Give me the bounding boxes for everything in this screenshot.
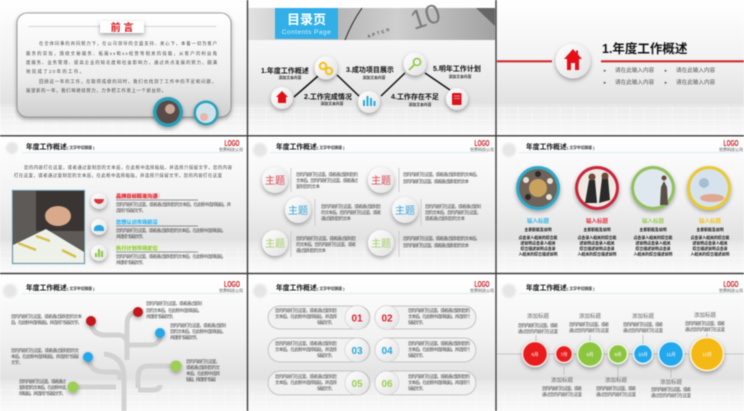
tree branches xyxy=(73,312,176,411)
caption blue: 主要职能及说明 xyxy=(524,227,552,232)
theme 4: 您的文本后。您的内容打在这里， xyxy=(425,209,481,216)
pill 01: 文本后。在此框中选择粘贴，并选择 xyxy=(275,313,338,320)
month 10 xyxy=(634,344,652,364)
caption blue xyxy=(519,217,558,256)
node green 2 xyxy=(68,382,78,392)
theme 2: 您的内容打在这里，或者通过复制您的文本后。 xyxy=(403,171,480,178)
label 3: 3.成功项目展示 xyxy=(346,65,394,74)
theme 3: 主题 xyxy=(288,205,308,217)
bullets: ➤ xyxy=(603,68,607,73)
label bottom 2: 通过您的内容打在这里 xyxy=(596,391,637,398)
month 12: 12月 xyxy=(702,352,712,358)
caption red: 入相关的综合描述说明 xyxy=(578,252,617,256)
text block 3: 并选择只保留文字。 xyxy=(170,334,200,341)
label 3: 添加文本内容 xyxy=(363,75,386,80)
caption green: 述说明点击录入相关 xyxy=(635,240,671,246)
label top 4: 添加标题 xyxy=(694,311,716,319)
intro text xyxy=(14,164,233,179)
text block 2: 您的内容打在这里，或者通过复制 xyxy=(146,300,203,307)
item 2: 您想认识市场前沿 xyxy=(116,218,158,226)
text block 5: 或者通过复制您的文 xyxy=(186,364,221,371)
item 2: 您的内容打在这里，或者通过复制您的文本后，在此框中选择粘贴， xyxy=(116,227,226,234)
label 4: 4.工作存在不足 xyxy=(391,92,439,101)
slide header xyxy=(502,280,743,298)
node: home xyxy=(271,87,293,109)
bullets: ➤ xyxy=(603,80,607,85)
node blue 2 xyxy=(83,352,93,362)
label top 2: 通过您的内容打在这里 xyxy=(569,327,610,334)
slide header: LOGO xyxy=(224,280,240,289)
label 5: 添加文本内容 xyxy=(449,74,472,79)
text block 4: 本后。在此框中选择粘贴，并选择只保留 xyxy=(11,353,80,360)
caption green xyxy=(634,217,673,256)
node green 1 xyxy=(170,360,182,372)
caption red: 输入标题 xyxy=(586,217,608,225)
theme 6: 您的内容打在这里，或者通过复制您的文本 xyxy=(403,242,470,249)
text block 5: 您的内容打在这里， xyxy=(186,358,220,365)
pill 01 xyxy=(268,306,370,330)
preface text: 地完成了20年的工作。 xyxy=(26,68,84,75)
theme 4: 主题 xyxy=(395,205,415,217)
node: gears xyxy=(314,56,338,80)
label bottom 3: 添加标题 xyxy=(660,378,682,386)
caption yellow xyxy=(691,217,730,256)
label bottom 3: 您的内容打在这里，或者 xyxy=(651,386,692,393)
slide header: 世界科技公司 xyxy=(719,146,743,152)
slide header: 年度工作概述 xyxy=(276,283,317,292)
photo circle blue xyxy=(516,166,560,210)
pill 04: 您的内容打在这里，或者通过复制您的 xyxy=(408,340,471,347)
pill 05: 文本后。在此框中选择粘贴，并选择 xyxy=(275,379,338,386)
slide header: 年度工作概述 xyxy=(26,142,67,151)
label top 3: 您的内容打在这里，或者 xyxy=(623,321,664,328)
caption blue: 点击录入相关的综合能 xyxy=(519,235,558,240)
caption red: 述说明点击录入相关 xyxy=(579,240,615,246)
label bottom 1: 通过您的内容打在这里 xyxy=(542,391,583,398)
label bottom 1: 您的内容打在这里，或者 xyxy=(542,385,583,392)
caption green: 点击录入相关的综合能 xyxy=(634,235,673,240)
label top 4 xyxy=(685,311,726,333)
month 9: 9月 xyxy=(614,352,622,358)
slide: numbered pills xyxy=(248,276,495,411)
label top 3: 添加标题 xyxy=(632,312,654,320)
label top 4: 通过您的内容打在这里 xyxy=(685,326,726,333)
slide header: LOGO xyxy=(224,139,240,148)
label bottom 3: 通过您的内容打在这里 xyxy=(651,392,692,399)
pill 04: 文本后。在此框中选择粘贴，并选择只 xyxy=(408,346,471,353)
title box: Contents Page xyxy=(282,29,331,36)
month 9 xyxy=(608,344,628,364)
theme 1: 主题 xyxy=(265,175,285,187)
slide header: 年度工作概述 xyxy=(276,142,317,151)
label 2: 添加文本内容 xyxy=(321,101,344,106)
caption red xyxy=(578,217,617,256)
slide header: 世界科技公司 xyxy=(219,287,243,293)
pill 05: 保留文字。 xyxy=(317,385,335,392)
label bottom 1 xyxy=(542,376,583,398)
text block 5: 本后。在此框中选择 xyxy=(186,370,221,377)
theme 3: 通过复制您的文本 xyxy=(321,215,352,222)
slide header xyxy=(253,280,494,298)
slide header: ( 文字中切换版 ) xyxy=(317,286,345,291)
text block 6: 复制您的文本后。在此框中选 xyxy=(19,384,67,391)
slide: contents xyxy=(248,0,495,135)
pill 06: 文本后。在此框中选择粘贴，并选择只 xyxy=(408,379,471,386)
theme 6 xyxy=(368,230,480,257)
caption yellow: 输入标题 xyxy=(699,217,721,225)
pill 06 xyxy=(375,371,476,395)
text block 5 xyxy=(186,358,221,383)
title box: 目录页 xyxy=(287,12,326,27)
text block 3: 您的文本后。在此框中选择粘贴， xyxy=(170,328,226,335)
text block 2: 并选择只保留文字。 xyxy=(146,313,176,320)
slide header: 年度工作概述 xyxy=(526,142,567,151)
preface text: 度服务、业务管理、提高企业的知名度和社会影响力，通过共点发展的努力，圆满 xyxy=(26,59,218,66)
caption green: 主要职能及说明 xyxy=(639,227,667,232)
label bottom 1: 添加标题 xyxy=(551,376,573,384)
label top 4: 您的内容打在这里，或者 xyxy=(685,320,726,327)
slide header: ( 文字中切换版 ) xyxy=(67,145,95,150)
section heading: 1.年度工作概述 xyxy=(602,41,688,56)
month 6: 6月 xyxy=(531,352,539,358)
pill 03: 您的内容打在这里，或者通过复制您 xyxy=(275,340,338,347)
theme 5: 主题 xyxy=(265,238,285,250)
bullets: ➤ xyxy=(664,68,668,73)
theme 2: 您的内容打在这里，或者通过复制您的文本 xyxy=(403,178,470,185)
text block 6 xyxy=(19,378,67,397)
month 12 xyxy=(690,338,724,370)
preface text xyxy=(26,40,218,94)
slide header xyxy=(502,139,743,157)
caption blue: 入相关的综合描述说明 xyxy=(519,252,558,256)
node red 1 xyxy=(86,316,96,326)
bullets: 请在此输入内容 xyxy=(615,66,655,74)
theme 4: 或者通过复制您的文本 xyxy=(425,215,466,222)
text block 1 xyxy=(11,313,83,326)
slide header: ( 文字中切换版 ) xyxy=(567,286,595,291)
photo circle 1 xyxy=(153,97,183,127)
item 3: 并选择只保留文字。 xyxy=(116,259,146,266)
caption red: 点击录入相关的综合能 xyxy=(578,235,617,240)
caption blue: 综合描述说明点击录 xyxy=(520,246,556,251)
bullets: 请在此输入内容 xyxy=(676,78,716,86)
slide: preface xyxy=(0,0,247,135)
photo circle green xyxy=(631,166,675,210)
pill 03: 文本后。在此框中选择粘贴，并选择 xyxy=(275,346,338,353)
slide: timeline xyxy=(497,276,744,411)
slide: section title xyxy=(497,0,744,135)
intro text: 您的内容打在这里，或者通过复制您的文本后，在此框中选择粘贴，并选择只保留文字。您的内容 xyxy=(24,164,233,171)
month 11: 11月 xyxy=(666,352,676,358)
pill 02: 保留文字。 xyxy=(408,319,426,326)
pill 02 xyxy=(375,306,476,330)
item 2 xyxy=(91,218,226,240)
caption green: 综合描述说明点击录 xyxy=(635,246,671,251)
label 1: 添加文本内容 xyxy=(279,75,302,80)
pill 02: 您的内容打在这里，或者通过复制您的 xyxy=(408,307,471,314)
label top 3: 通过您的内容打在这里 xyxy=(623,327,664,334)
bullets: 请在此输入内容 xyxy=(676,66,716,74)
text block 2: 您的文本后。在此框中选择粘贴， xyxy=(146,307,202,314)
slide header: ( 文字中切换版 ) xyxy=(67,286,95,291)
theme 1: 复制您的文本 xyxy=(296,183,321,190)
pill 06: 保留文字。 xyxy=(408,385,426,392)
caption green: 输入标题 xyxy=(642,217,664,225)
month 6 xyxy=(522,342,548,366)
label bottom 3 xyxy=(651,378,692,399)
slide header: 世界科技公司 xyxy=(219,146,243,152)
bullets: 请在此输入内容 xyxy=(615,78,655,86)
pill 02: 02 xyxy=(381,314,393,324)
pill 03 xyxy=(268,338,370,362)
caption yellow: 综合描述说明点击录 xyxy=(692,246,728,251)
theme 1: 您的内容打在这里，或者通过复制您的 xyxy=(296,171,359,178)
slide header: ( 文字中切换版 ) xyxy=(317,145,345,150)
pill 01: 保留文字。 xyxy=(317,319,335,326)
label top 1: 添加标题 xyxy=(527,312,549,320)
text block 1: 后，在此框中选择粘贴，并选择只保留文字。 xyxy=(11,319,82,326)
item 3: 执行计划市场定位 xyxy=(116,244,158,252)
caption yellow: 点击录入相关的综合能 xyxy=(691,235,730,240)
theme 6: 您的内容打在这里，或者通过复制您的文本后。 xyxy=(403,235,480,242)
slide header: 世界科技公司 xyxy=(719,287,743,293)
theme 6: 主题 xyxy=(371,238,391,250)
month 8: 8月 xyxy=(586,352,594,358)
text block 3: 您的内容打在这里，或者通过复制 xyxy=(170,322,227,329)
node: chart xyxy=(358,91,380,113)
caption red: 综合描述说明点击录 xyxy=(579,246,615,251)
label 4 xyxy=(391,92,439,107)
theme 5: 的文本后。您的内容打在这里，或者 xyxy=(296,241,357,248)
label top 2: 添加标题 xyxy=(579,312,601,320)
node: book xyxy=(446,88,468,110)
slide: overview with photo xyxy=(0,137,247,272)
slide: tree xyxy=(0,276,247,411)
pill 05 xyxy=(268,371,370,395)
label 1 xyxy=(261,66,309,80)
panel: preface card xyxy=(17,13,231,117)
pill 05: 05 xyxy=(351,379,363,390)
label bottom 2 xyxy=(596,376,637,398)
item 1: 您的内容打在这里，或者通过复制您的文本后，在此框中选择粘贴，并 xyxy=(116,201,232,208)
caption blue: 述说明点击录入相关 xyxy=(520,240,556,246)
slide header xyxy=(3,280,243,298)
slide: themes xyxy=(248,137,495,272)
title box xyxy=(275,8,338,39)
theme 1: 文本后。您的内容打在这里，或者通过 xyxy=(296,177,359,184)
caption red: 主要职能及说明 xyxy=(583,227,611,232)
theme 3: 的文本后。您的内容打在这里，或者 xyxy=(321,209,382,216)
theme 2 xyxy=(368,167,480,193)
preface text: 在全体同事的共同努力下，在公司领导的全面支持、关心下，本着一切为客户 xyxy=(39,40,217,47)
text block 3 xyxy=(170,322,227,341)
pill 02: 文本后。在此框中选择粘贴，并选择只 xyxy=(408,313,471,320)
slide: four circles xyxy=(497,137,744,272)
label bottom 2: 您的内容打在这里，或者 xyxy=(596,385,637,392)
text block 6: 择粘贴，并选择只保留文字。 xyxy=(19,390,66,397)
theme 3 xyxy=(285,197,382,226)
intro text: 打在这里，或者通过复制您的文本后，在此框中选择粘贴，并选择只保留文字。您的内容打在这里 xyxy=(14,172,223,179)
slide header: 世界科技公司 xyxy=(470,287,494,293)
heading tab: 前 言 xyxy=(111,21,133,34)
preface text: 展望新的一年，我们将继续努力，力争把工作更上一个新台阶。 xyxy=(26,87,166,94)
text block 2 xyxy=(146,300,203,320)
label 5: 5.明年工作计划 xyxy=(433,64,481,73)
label 5 xyxy=(433,64,481,79)
red rule xyxy=(497,60,744,62)
pill 01: 您的内容打在这里，或者通过复制您 xyxy=(275,307,338,314)
pill 04: 保留文字。 xyxy=(408,352,426,359)
pill 05: 您的内容打在这里，或者通过复制您 xyxy=(275,373,338,380)
label top 2 xyxy=(569,312,610,334)
label top 2: 您的内容打在这里，或者 xyxy=(569,321,610,328)
timeline axis xyxy=(497,333,744,378)
caption yellow: 述说明点击录入相关 xyxy=(692,240,728,246)
slide header: LOGO xyxy=(474,280,490,289)
pill 06: 您的内容打在这里，或者通过复制您的 xyxy=(408,373,471,380)
node: magnifier xyxy=(404,52,426,76)
theme 4 xyxy=(392,197,482,226)
theme 2: 主题 xyxy=(371,175,391,187)
text block 4: 文字。 xyxy=(11,359,23,366)
text block 4: 您的内容打在这里，或者通过复制您的文 xyxy=(11,347,80,354)
pill 03: 03 xyxy=(351,346,363,357)
header photo: APTER xyxy=(367,26,392,39)
text block 1: 您的内容打在这里，或者通过复制您的文本 xyxy=(11,313,83,320)
bullets: ➤ xyxy=(664,80,668,85)
label 2 xyxy=(304,92,352,106)
theme 5 xyxy=(262,230,357,257)
item 1: 选择只保留文字。 xyxy=(116,207,146,214)
item 3: 您的内容打在这里，或者通过复制您的文本后，在此框中选择粘贴， xyxy=(116,253,226,260)
slide header: LOGO xyxy=(474,139,490,148)
month 10: 10月 xyxy=(638,352,648,358)
month 7: 7月 xyxy=(560,352,568,358)
pill 04: 04 xyxy=(381,346,393,357)
label 1: 1.年度工作概述 xyxy=(261,66,309,75)
label 4: 添加文本内容 xyxy=(409,102,432,107)
heading tab xyxy=(100,21,144,34)
theme 5: 通过复制您的文本 xyxy=(296,247,327,254)
label top 1 xyxy=(518,312,559,335)
slide header xyxy=(6,139,243,154)
photo circle yellow xyxy=(687,166,731,210)
preface text: 服务的宗旨，围绕文秘服务、拓展xx和xx经营等相关的技能，从客户的利益角 xyxy=(26,50,217,57)
theme 3: 您的内容打在这里，或者通过复制您 xyxy=(321,203,382,210)
item 1 xyxy=(91,192,232,214)
caption yellow: 入相关的综合描述说明 xyxy=(691,252,730,256)
theme 1 xyxy=(262,167,359,193)
item 1: 品牌目标精准沟通 xyxy=(116,192,158,200)
item 2: 并选择只保留文字。 xyxy=(116,233,146,240)
text block 4 xyxy=(11,347,80,366)
header photo xyxy=(248,0,495,40)
label top 1: 通过您的内容打在这里 xyxy=(518,328,559,335)
item 3 xyxy=(91,244,226,266)
connector lines xyxy=(294,73,450,97)
text block 5: 粘贴，并选择只保留 xyxy=(186,376,217,383)
photo circle 2 xyxy=(194,100,218,126)
label top 1: 您的内容打在这里，或者 xyxy=(518,322,559,329)
pill 03: 保留文字。 xyxy=(317,352,335,359)
photo xyxy=(12,190,85,264)
theme 4: 您的内容打在这里，或者通过复制 xyxy=(425,203,482,210)
label 3 xyxy=(346,65,394,80)
slide header: 年度工作概述 xyxy=(26,283,67,292)
slide header: 世界科技公司 xyxy=(470,146,494,152)
node blue 1 xyxy=(155,328,165,338)
caption blue: 输入标题 xyxy=(527,217,549,225)
label bottom 2: 添加标题 xyxy=(605,376,627,384)
pill 06: 06 xyxy=(381,379,393,390)
preface text: 回顾这一年的工作，在取得成绩的同时，我们也找到了工作中的不足和问题， xyxy=(39,78,216,85)
pill 04 xyxy=(375,338,476,362)
slide header xyxy=(253,139,494,157)
month 7 xyxy=(556,346,572,362)
slide header: 年度工作概述 xyxy=(526,283,567,292)
theme 5: 您的内容打在这里，或者通过复制您 xyxy=(296,235,357,242)
divider dots xyxy=(29,26,216,28)
caption yellow: 主要职能及说明 xyxy=(696,227,724,232)
slide header: ( 文字中切换版 ) xyxy=(567,145,595,150)
text block 6: 您的内容打在这里，或者通过 xyxy=(19,378,67,385)
bullets xyxy=(603,66,716,86)
label 2: 2.工作完成情况 xyxy=(304,92,352,101)
label top 3 xyxy=(623,312,664,334)
month 11 xyxy=(658,342,684,366)
node red 2 xyxy=(133,307,143,317)
photo circle red xyxy=(575,166,619,210)
icon: house xyxy=(556,44,590,78)
month 8 xyxy=(578,342,602,366)
caption green: 入相关的综合描述说明 xyxy=(634,252,673,256)
pill 01: 01 xyxy=(351,314,363,324)
